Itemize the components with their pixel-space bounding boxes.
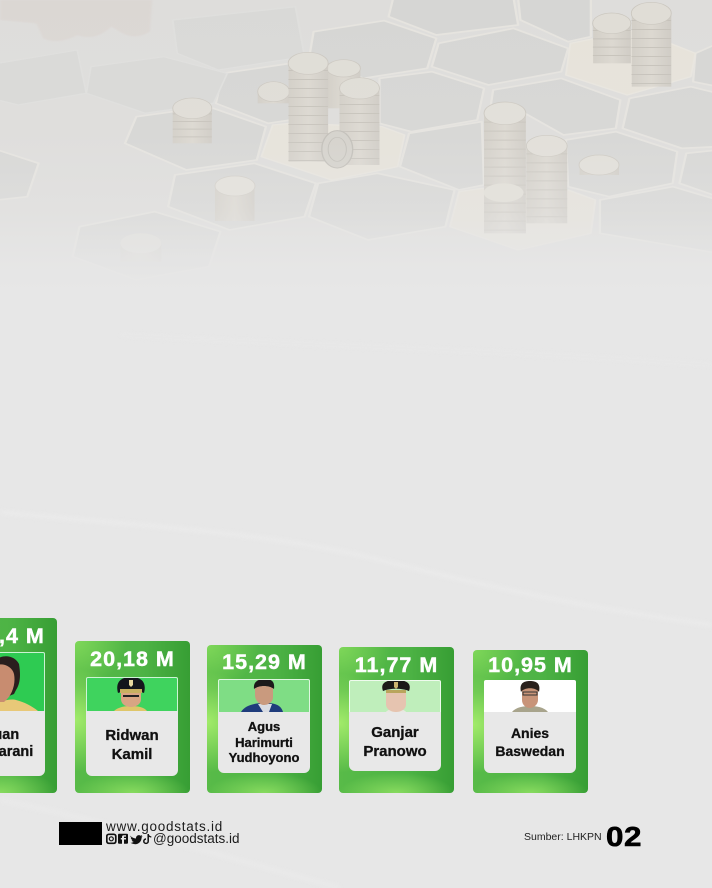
name (86, 711, 178, 776)
name (484, 712, 576, 773)
footer: website: www.goodstats.id (106, 819, 223, 834)
photo (86, 677, 178, 711)
value: 20,18 M (90, 647, 175, 671)
footer: social handle: @goodstats.id (153, 831, 240, 846)
name (218, 712, 310, 773)
card: Ganjar Pranowo (339, 647, 454, 793)
photo (484, 680, 576, 712)
marble streaks (0, 335, 712, 888)
name (349, 712, 441, 771)
name: Ridwan (105, 727, 159, 744)
photo (349, 680, 441, 712)
name: Anies (511, 725, 549, 741)
card: Anies Baswedan (473, 650, 588, 793)
name (0, 711, 45, 776)
footer: logo block (59, 822, 102, 845)
photo (218, 679, 310, 712)
name: Pranowo (363, 742, 427, 760)
name: Agus (248, 719, 280, 734)
value: 15,29 M (222, 650, 307, 674)
hand (0, 0, 152, 41)
name: Ganjar (371, 724, 419, 741)
source: Sumber: LHKPN (524, 831, 602, 843)
photo (0, 652, 45, 711)
card: Puan Maharani (0, 618, 57, 793)
name: Baswedan (495, 742, 565, 758)
name: Harimurti (235, 735, 293, 750)
coin stacks (120, 2, 671, 262)
footer: social icons (106, 834, 152, 844)
name: Yudhoyono (229, 750, 299, 765)
page number: 02 (606, 821, 642, 852)
card: Agus Harimurti Yudhoyono (207, 645, 322, 793)
name: Kamil (112, 746, 152, 762)
value: 10,95 M (488, 653, 573, 677)
value: 11,77 M (355, 653, 438, 677)
card: Ridwan Kamil (75, 641, 190, 793)
